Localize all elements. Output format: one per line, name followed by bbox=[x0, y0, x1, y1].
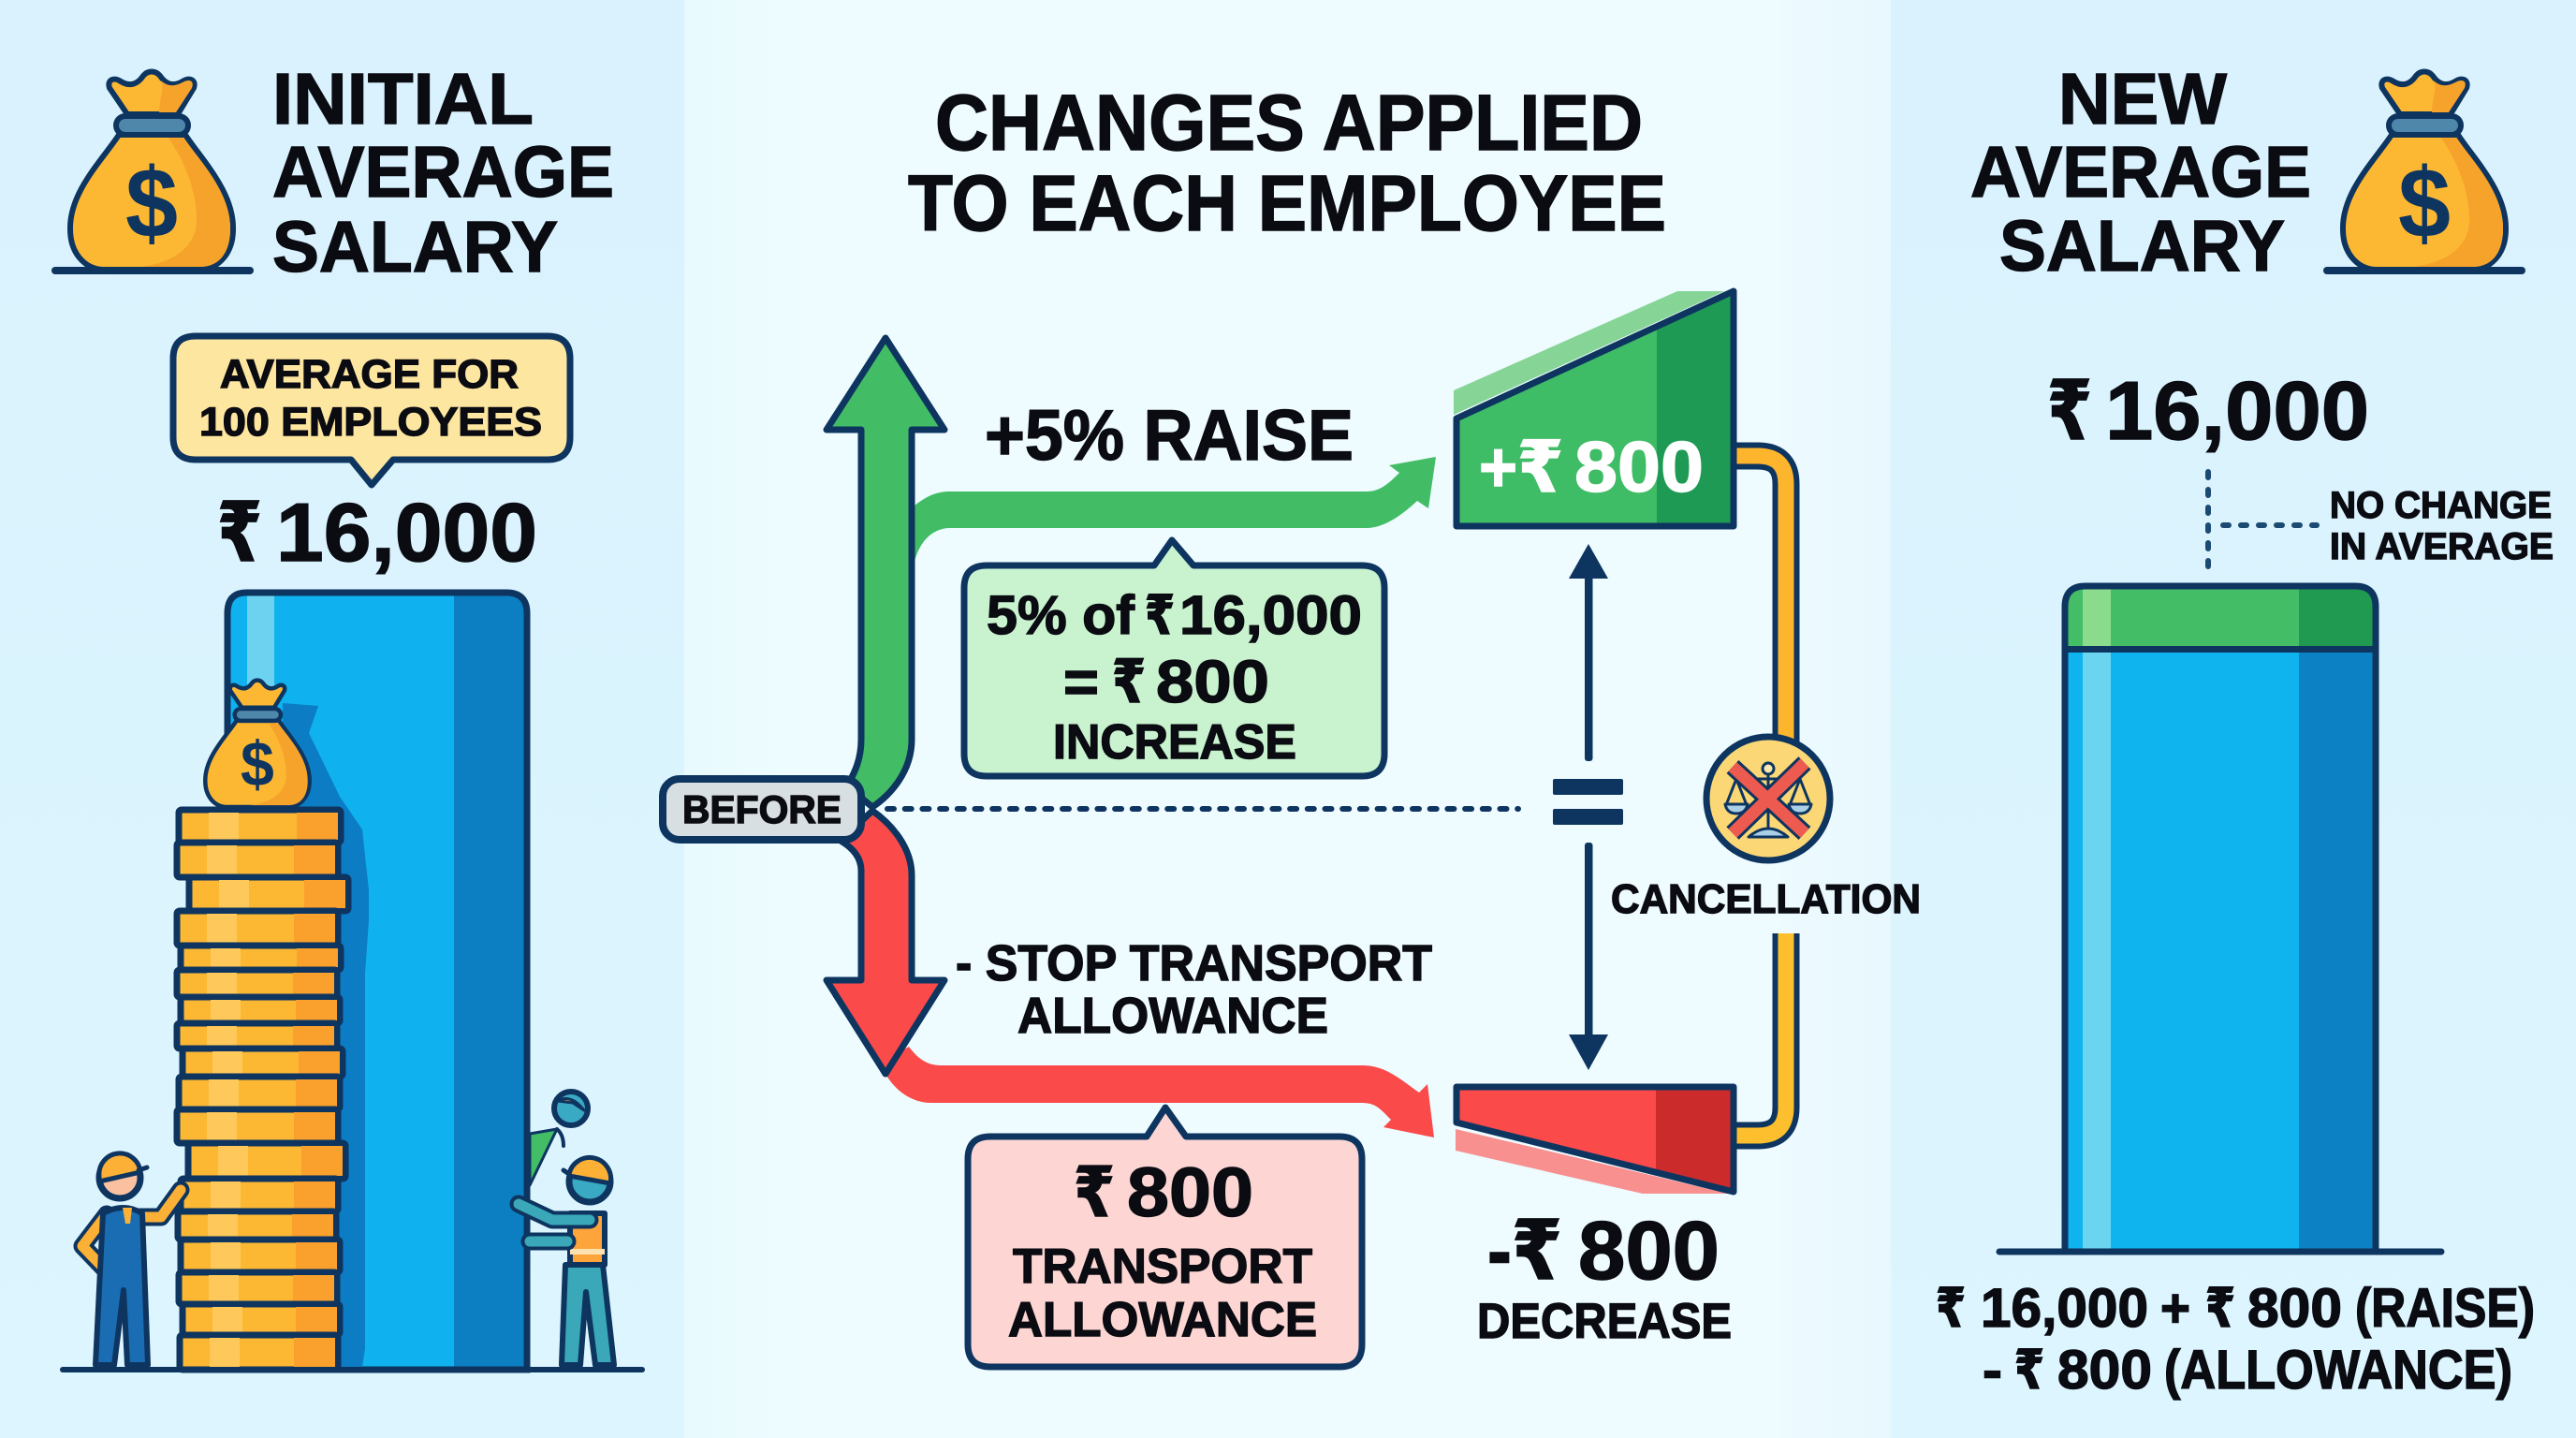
callout: 5% calculation: ₹ bbox=[1112, 648, 1146, 715]
callout: 5% calculation: 16,000 bbox=[1179, 585, 1362, 646]
ground line right bbox=[1999, 1249, 2441, 1255]
callout: average for 100 employees: AVERAGE FOR bbox=[220, 352, 519, 397]
callout: 5% calculation: ₹ bbox=[1145, 585, 1175, 646]
callout: 5% calculation: = bbox=[1063, 648, 1099, 715]
value: initial 16,000: ₹ bbox=[217, 486, 262, 579]
callout: 5% calculation bbox=[964, 540, 1384, 776]
formula: new salary calculation: 800 bbox=[2057, 1340, 2152, 1401]
callout: transport allowance: ₹ bbox=[1074, 1153, 1115, 1231]
connector: cancellation pipe bottom bbox=[1734, 933, 1786, 1136]
value: -800 decrease: -₹ bbox=[1487, 1204, 1562, 1297]
bar: new salary bbox=[2062, 583, 2378, 1252]
arrow: green up bbox=[827, 338, 944, 807]
label: before bbox=[663, 779, 861, 840]
title: initial average salary: SALARY bbox=[272, 207, 558, 287]
connector: cancellation pipe top bbox=[1734, 456, 1786, 749]
label: no change in average: IN AVERAGE bbox=[2330, 526, 2554, 567]
value: -800 decrease: DECREASE bbox=[1477, 1294, 1732, 1349]
label: cancellation: CANCELLATION bbox=[1611, 876, 1921, 922]
panel: new salary background bbox=[1891, 0, 2576, 1438]
formula: new salary calculation: + bbox=[2160, 1278, 2190, 1339]
ground line left bbox=[63, 1367, 642, 1372]
title: changes applied to each employee: CHANGES APPLIED bbox=[935, 79, 1643, 167]
icon: money bag left bbox=[55, 71, 250, 271]
callout: transport allowance: 800 bbox=[1127, 1153, 1253, 1231]
callout: 5% calculation: INCREASE bbox=[1053, 715, 1296, 770]
formula: new salary calculation: (RAISE) bbox=[2355, 1278, 2535, 1339]
wedge: +800 green bbox=[1454, 291, 1734, 526]
callout: average for 100 employees: 100 EMPLOYEES bbox=[199, 400, 542, 445]
value: new 16,000: ₹ bbox=[2047, 364, 2092, 457]
callout: transport allowance: TRANSPORT bbox=[1013, 1240, 1312, 1294]
formula: new salary calculation bbox=[1936, 1278, 2535, 1401]
formula: new salary calculation: ₹ bbox=[2014, 1340, 2044, 1401]
value: initial 16,000: 16,000 bbox=[276, 486, 537, 579]
symbol: equals bbox=[1553, 779, 1623, 825]
title: new average salary bbox=[1970, 59, 2311, 286]
value: -800 decrease bbox=[1477, 1204, 1732, 1349]
label: no change in average: NO CHANGE bbox=[2330, 485, 2552, 526]
dotted connector: no change bbox=[2208, 472, 2317, 567]
title: changes applied to each employee: TO EACH EMPLOYEE bbox=[908, 159, 1666, 247]
panel: initial salary background bbox=[0, 0, 684, 1438]
title: initial average salary bbox=[272, 59, 614, 287]
arrow: green ribbon to raise bbox=[915, 457, 1436, 562]
label: before: BEFORE bbox=[682, 787, 842, 831]
callout: transport allowance bbox=[968, 1108, 1362, 1367]
formula: new salary calculation: 16,000 bbox=[1981, 1278, 2148, 1339]
icon: left worker bbox=[82, 1153, 181, 1365]
icon: small money bag on coins: $ bbox=[241, 730, 274, 800]
coin stack bbox=[177, 810, 348, 1370]
label: no change in average bbox=[2330, 485, 2554, 567]
heading: stop transport allowance: ALLOWANCE bbox=[1017, 988, 1328, 1044]
wedge: +800 green: 800 bbox=[1574, 428, 1704, 507]
title: new average salary: NEW bbox=[2058, 59, 2227, 139]
callout: 5% calculation: 5% of bbox=[987, 585, 1135, 646]
callout: average for 100 employees bbox=[173, 336, 570, 485]
icon: right workers bbox=[519, 1092, 614, 1365]
callout: 5% calculation: 800 bbox=[1156, 648, 1269, 715]
heading: stop transport allowance: - STOP TRANSPORT bbox=[956, 935, 1432, 991]
arrow: equal down bbox=[1569, 843, 1608, 1070]
icon: money bag left: $ bbox=[125, 148, 178, 258]
title: initial average salary: AVERAGE bbox=[272, 132, 614, 213]
formula: new salary calculation: 800 bbox=[2247, 1278, 2342, 1339]
wedge: -800 red bbox=[1456, 1087, 1734, 1194]
bar: initial salary bbox=[225, 590, 529, 1372]
wedge: +800 green: +₹ bbox=[1479, 428, 1563, 507]
arrow: equal up bbox=[1569, 544, 1608, 761]
icon: small money bag on coins bbox=[205, 681, 310, 807]
title: new average salary: SALARY bbox=[1999, 206, 2285, 286]
title: changes applied to each employee bbox=[908, 79, 1666, 247]
formula: new salary calculation: ₹ bbox=[1936, 1278, 1966, 1339]
arrow: red down bbox=[827, 811, 944, 1074]
heading: +5% raise: +5% RAISE bbox=[985, 396, 1354, 476]
callout: transport allowance: ALLOWANCE bbox=[1008, 1293, 1317, 1347]
title: initial average salary: INITIAL bbox=[272, 59, 534, 139]
dotted baseline bbox=[887, 806, 1518, 812]
formula: new salary calculation: ₹ bbox=[2205, 1278, 2235, 1339]
arrow: red ribbon to allowance bbox=[880, 1047, 1434, 1137]
value: new 16,000: 16,000 bbox=[2105, 364, 2369, 457]
icon: money bag right: $ bbox=[2398, 148, 2451, 258]
heading: stop transport allowance bbox=[956, 935, 1432, 1044]
icon: money bag right bbox=[2327, 71, 2522, 271]
title: new average salary: AVERAGE bbox=[1970, 132, 2311, 213]
value: -800 decrease: 800 bbox=[1578, 1204, 1720, 1297]
formula: new salary calculation: (ALLOWANCE) bbox=[2164, 1340, 2512, 1401]
formula: new salary calculation: - bbox=[1983, 1340, 2002, 1401]
panel: changes background bbox=[684, 0, 1891, 1438]
icon: cancelled scales bbox=[1706, 737, 1830, 860]
